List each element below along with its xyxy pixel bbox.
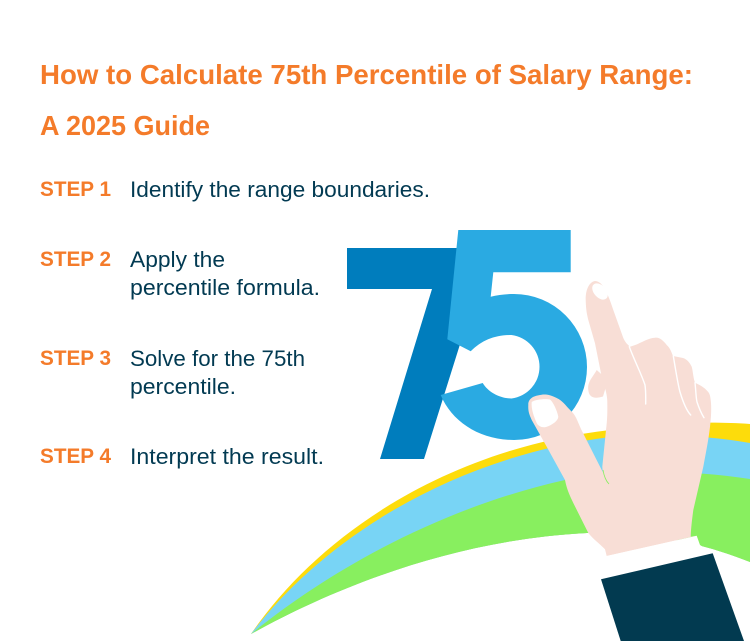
illustration: hand pointing (528, 280, 711, 556)
step 2 (40, 247, 320, 300)
thumbnail (532, 399, 558, 427)
step 2: percentile formula. (130, 275, 320, 300)
step 4: STEP 4 (40, 445, 111, 468)
rainbow arc (251, 423, 750, 634)
step 3: percentile. (130, 374, 236, 399)
step 2: Apply the (130, 247, 225, 272)
number 7 (347, 248, 467, 459)
index fingernail (589, 280, 611, 303)
shirt cuff (601, 536, 713, 579)
title: How to Calculate 75th Percentile of Salary Range: (40, 59, 693, 90)
thumb crease (603, 470, 609, 484)
step 4 (40, 444, 324, 469)
step 3: STEP 3 (40, 347, 111, 370)
step 1: Identify the range boundaries. (130, 177, 430, 202)
title (40, 59, 693, 141)
step 3 (40, 346, 305, 399)
jacket sleeve (601, 553, 744, 641)
title: A 2025 Guide (40, 110, 210, 141)
number 5 (441, 230, 587, 440)
folded finger behind index (588, 370, 608, 398)
step 1: STEP 1 (40, 178, 111, 201)
step 2: STEP 2 (40, 248, 111, 271)
step 3: Solve for the 75th (130, 346, 305, 371)
hand (528, 281, 711, 556)
knuckle creases (629, 347, 704, 418)
step 4: Interpret the result. (130, 444, 324, 469)
